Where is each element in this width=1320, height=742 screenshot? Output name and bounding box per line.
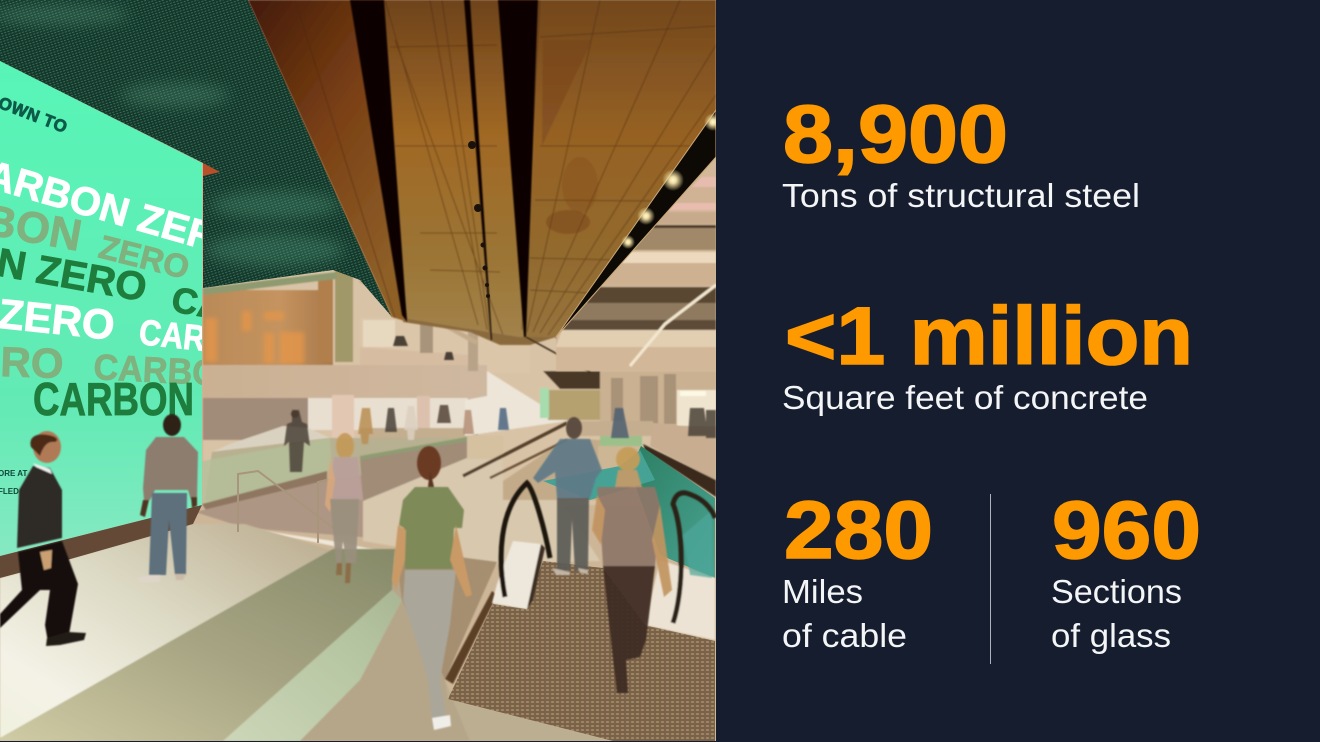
- number: 280: 280: [784, 485, 933, 576]
- floor: [0, 524, 613, 741]
- label: glass: Sections: [1051, 574, 1182, 611]
- orange soffit notch: [203, 163, 220, 176]
- right lit ceiling: [556, 157, 716, 371]
- stat panel: [716, 0, 1320, 742]
- number: 8,900: 8,900: [783, 89, 1008, 180]
- label: concrete: Square feet of concrete: [782, 380, 1148, 417]
- number: under 1 million: <1 million: [785, 291, 1193, 382]
- stat: cable: [782, 485, 933, 655]
- number: 960: 960: [1052, 485, 1201, 576]
- black ceiling strips: [350, 0, 538, 340]
- screen text: line 3 carbon: CARBON: [169, 279, 331, 346]
- screen text: line 2 zero: ZERO: [95, 228, 193, 286]
- wooden ceiling: [248, 0, 716, 372]
- mezzanine background: [203, 265, 716, 505]
- person: woman front: [592, 447, 672, 693]
- track lights: [468, 141, 490, 298]
- label: glass line 2: of glass: [1051, 618, 1171, 655]
- person: man in grey top: [137, 414, 198, 582]
- screen base plinth: [0, 505, 202, 578]
- white stair wedge: [465, 371, 567, 436]
- distant people: [284, 336, 716, 472]
- columns: [335, 267, 353, 362]
- LED screen: [0, 61, 202, 556]
- green ceiling mesh: [0, 0, 392, 317]
- escalator left balustrade: [492, 483, 550, 609]
- black light strip: [556, 110, 716, 337]
- label: cable line 2: of cable: [782, 618, 907, 655]
- photo: station interior rendering: [0, 0, 722, 741]
- person: woman walking left: [325, 433, 363, 583]
- teal pit: [543, 446, 715, 578]
- base fill: [0, 0, 716, 741]
- stat: glass: [1051, 485, 1201, 655]
- stat: concrete: [782, 291, 1193, 417]
- ceiling moire highlights: [0, 5, 345, 266]
- ceiling downlights: [621, 113, 722, 249]
- distant concourse: [543, 371, 608, 389]
- divider: [990, 494, 991, 664]
- screen text: line 5 carbon: CARBON: [93, 346, 245, 395]
- person: man in blue shirt: [533, 417, 602, 575]
- escalator right balustrade: [645, 493, 715, 640]
- screen text: line 4 carbon: CARBON: [137, 311, 276, 366]
- lower level back wall: [203, 398, 308, 440]
- label: steel: Tons of structural steel: [782, 178, 1140, 215]
- person: man in suit: [0, 431, 86, 646]
- screen text: carbon: CARBON: [33, 373, 194, 425]
- handrails on stairs: [238, 471, 336, 543]
- person: woman in green: [392, 446, 472, 730]
- lower level floors and stairs: [195, 421, 716, 578]
- screen text: line 5 zero: RO: [0, 338, 64, 387]
- stat: steel: [782, 89, 1140, 215]
- label: cable: Miles: [782, 574, 863, 611]
- escalator mat: [448, 561, 715, 741]
